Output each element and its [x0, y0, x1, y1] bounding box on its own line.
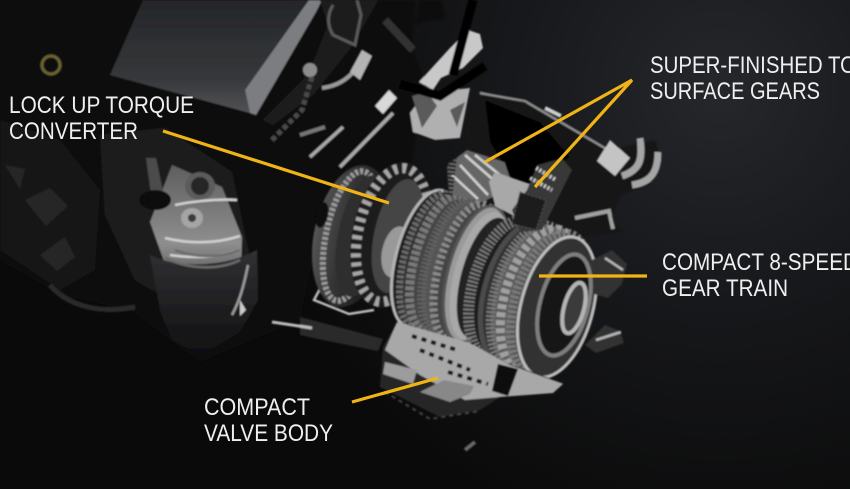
- label: lock up torque converter: LOCK UP TORQUE: [9, 92, 194, 119]
- second gear: [512, 158, 572, 232]
- converter gear crown: [337, 154, 447, 316]
- clutch drum stack: [379, 183, 524, 349]
- label: compact valve body: VALVE BODY: [204, 420, 333, 447]
- oil cooler: [597, 140, 630, 176]
- valve body: [380, 322, 563, 417]
- bright shield plate: [150, 165, 242, 307]
- engine block: [0, 0, 662, 362]
- upper bracket: [415, 0, 445, 25]
- transmission case right block: [465, 90, 662, 240]
- gear train drum stack: [455, 211, 610, 386]
- upper pipes mass: [262, 0, 425, 180]
- leader: lock up torque converter: [163, 131, 389, 203]
- gear shaft: [489, 172, 538, 221]
- left bracket and pipe: [300, 317, 383, 351]
- dark engine mass: [0, 0, 330, 362]
- catalytic bulb: [150, 250, 258, 356]
- converter plate: [300, 158, 404, 314]
- leader: super-finished gears: [485, 80, 632, 187]
- leader: gear train: [539, 274, 647, 278]
- transmission: [272, 150, 627, 450]
- label: super-finished gears: SURFACE GEARS: [650, 78, 820, 105]
- helical gear: [447, 150, 513, 202]
- leader lines: [163, 80, 647, 402]
- leader: valve body: [352, 378, 438, 402]
- output bracket: [585, 250, 627, 353]
- label: lock up torque converter: CONVERTER: [9, 118, 138, 145]
- heat shield: [100, 128, 258, 312]
- oil filler ring: [42, 56, 60, 74]
- label: compact 8-speed gear train: GEAR TRAIN: [662, 275, 788, 302]
- engine cover: [110, 0, 309, 113]
- spark plug: [146, 158, 164, 201]
- label: compact valve body: COMPACT: [204, 394, 310, 421]
